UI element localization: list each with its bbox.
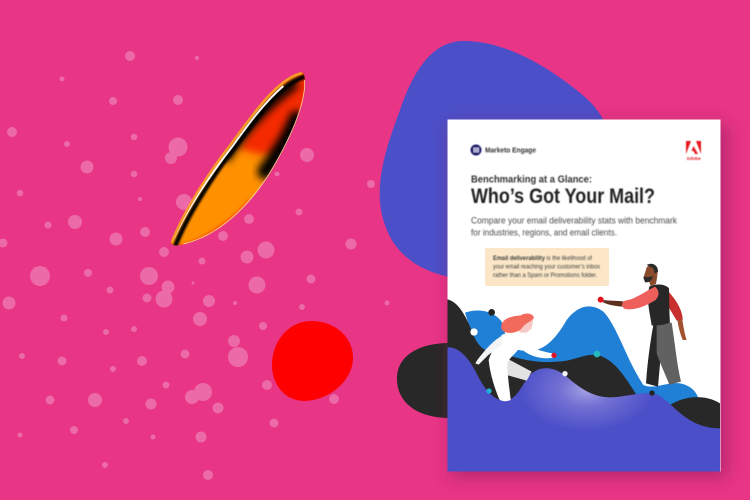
man: red ball [598, 297, 604, 303]
woman: hair [501, 313, 534, 333]
woman: grey leg [507, 358, 532, 381]
illustration: hills and people [447, 264, 720, 473]
orange surfboard shape [170, 72, 306, 246]
man: forearm [603, 300, 623, 307]
woman: face [519, 318, 533, 333]
blue hills [465, 306, 698, 405]
dark hills [448, 299, 636, 401]
man: hair and beard [643, 264, 658, 282]
report card [447, 120, 720, 473]
woman figure [475, 313, 557, 401]
card shadow [450, 124, 728, 478]
woman: left arm [475, 335, 503, 365]
description [471, 216, 677, 238]
man: neck and head [644, 265, 658, 286]
man: grey leg [657, 323, 681, 385]
Marketo Engage logo: Marketo Engage [485, 148, 536, 154]
man figure [598, 264, 687, 387]
woman: body and legs [488, 334, 518, 402]
man: far arm [668, 292, 683, 321]
callout: definition: Email deliverability is the likelihood of [493, 256, 592, 262]
title: Who’s Got Your Mail? [471, 185, 655, 208]
description: for industries, regions, and email clients. [471, 228, 617, 238]
man: sleeve [622, 287, 658, 309]
purple foreground wave [447, 347, 720, 473]
blue blob [380, 41, 608, 277]
woman: red ball [551, 353, 557, 358]
man: vest [648, 285, 670, 325]
man: dark leg [646, 325, 660, 387]
red blob [272, 321, 353, 401]
scattered pink dots [0, 51, 390, 480]
man: far hand [677, 319, 687, 340]
card background [448, 120, 720, 472]
Marketo Engage logo [470, 144, 536, 156]
callout: definition [485, 248, 609, 286]
Adobe logo: Adobe [686, 156, 701, 161]
callout: definition: your email reaching your customer’s inbox [493, 264, 600, 270]
accent dots [470, 309, 655, 396]
subtitle: Benchmarking at a Glance: [471, 174, 592, 186]
woman: right arm [523, 350, 553, 358]
callout: definition: rather than a Spam or Promotions folder. [493, 273, 597, 279]
dark hill right [670, 397, 720, 430]
dark blob [397, 343, 450, 418]
description: Compare your email deliverability stats with benchmark [471, 216, 677, 226]
Adobe logo [686, 141, 701, 161]
